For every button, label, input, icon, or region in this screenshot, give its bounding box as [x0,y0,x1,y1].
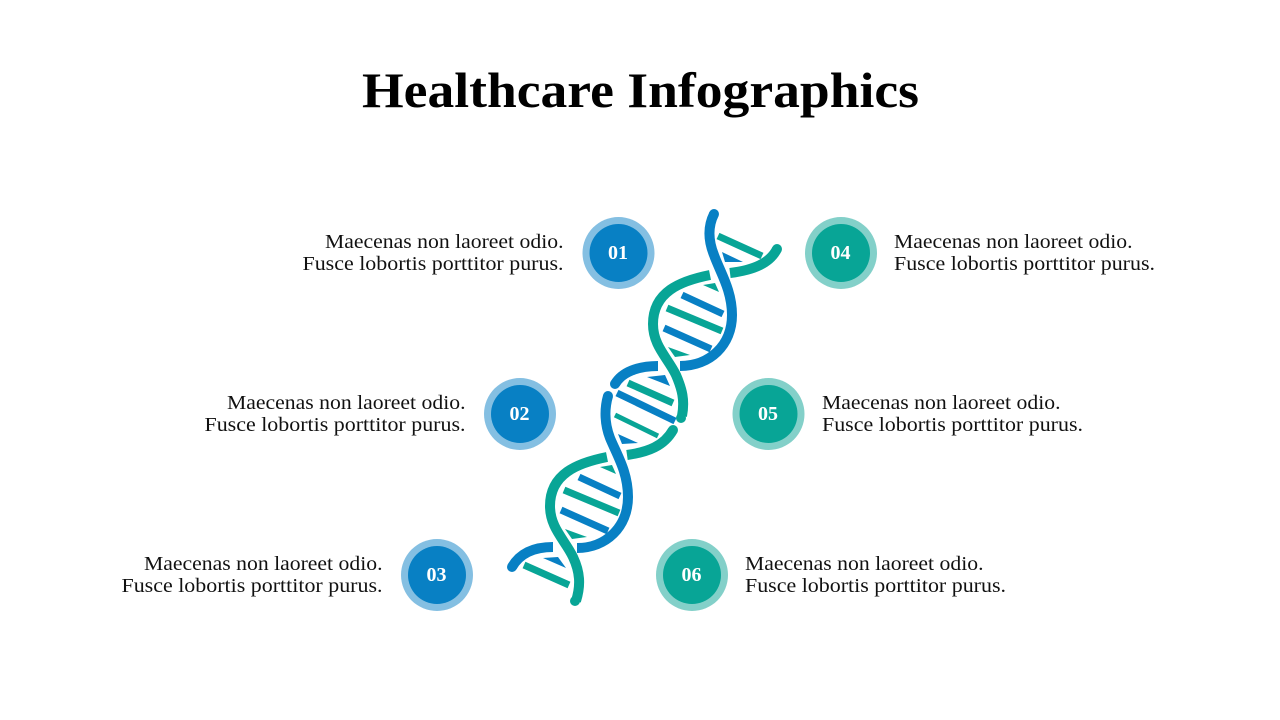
text 03 [122,553,382,597]
icon: DNA helix [507,209,782,606]
text 02: Maecenas non laoreet odio. [227,392,466,414]
badge 03 [401,539,473,611]
badge 05 [732,378,804,450]
item 05 [732,378,1083,450]
badge 02 [484,378,556,450]
badge 01 [582,217,654,289]
text 01: Fusce lobortis porttitor purus. [302,253,564,275]
text 05: Maecenas non laoreet odio. [822,392,1060,414]
badge 02: 02 [510,403,530,425]
text 06 [745,553,1006,597]
badge 04: 04 [830,242,850,264]
upper strands [680,214,732,366]
badge 01: 01 [608,242,628,264]
item 03 [122,539,473,611]
top rungs [718,236,762,256]
text 01 [302,231,564,275]
text 06: Maecenas non laoreet odio. [745,553,984,575]
item 06 [656,539,1006,611]
text 01: Maecenas non laoreet odio. [325,231,564,253]
text 03: Maecenas non laoreet odio. [144,553,382,575]
text 06: Fusce lobortis porttitor purus. [745,575,1006,597]
title: Healthcare Infographics [362,62,919,118]
text 02: Fusce lobortis porttitor purus. [204,414,466,436]
text 05: Fusce lobortis porttitor purus. [822,414,1083,436]
text 05 [822,392,1083,436]
text 04: Maecenas non laoreet odio. [894,231,1132,253]
item 04 [805,217,1155,289]
text 03: Fusce lobortis porttitor purus. [122,575,382,597]
badge 06 [656,539,728,611]
middle rungs [647,375,670,386]
text 04 [894,231,1155,275]
item 01 [302,217,654,289]
lower rungs [600,465,616,474]
item 02 [204,378,556,450]
lower strands [577,396,628,548]
text 04: Fusce lobortis porttitor purus. [894,253,1155,275]
badge 05: 05 [758,403,778,425]
badge 04 [805,217,877,289]
text 02 [204,392,466,436]
badge 03: 03 [426,564,446,586]
badge 06: 06 [682,564,702,586]
